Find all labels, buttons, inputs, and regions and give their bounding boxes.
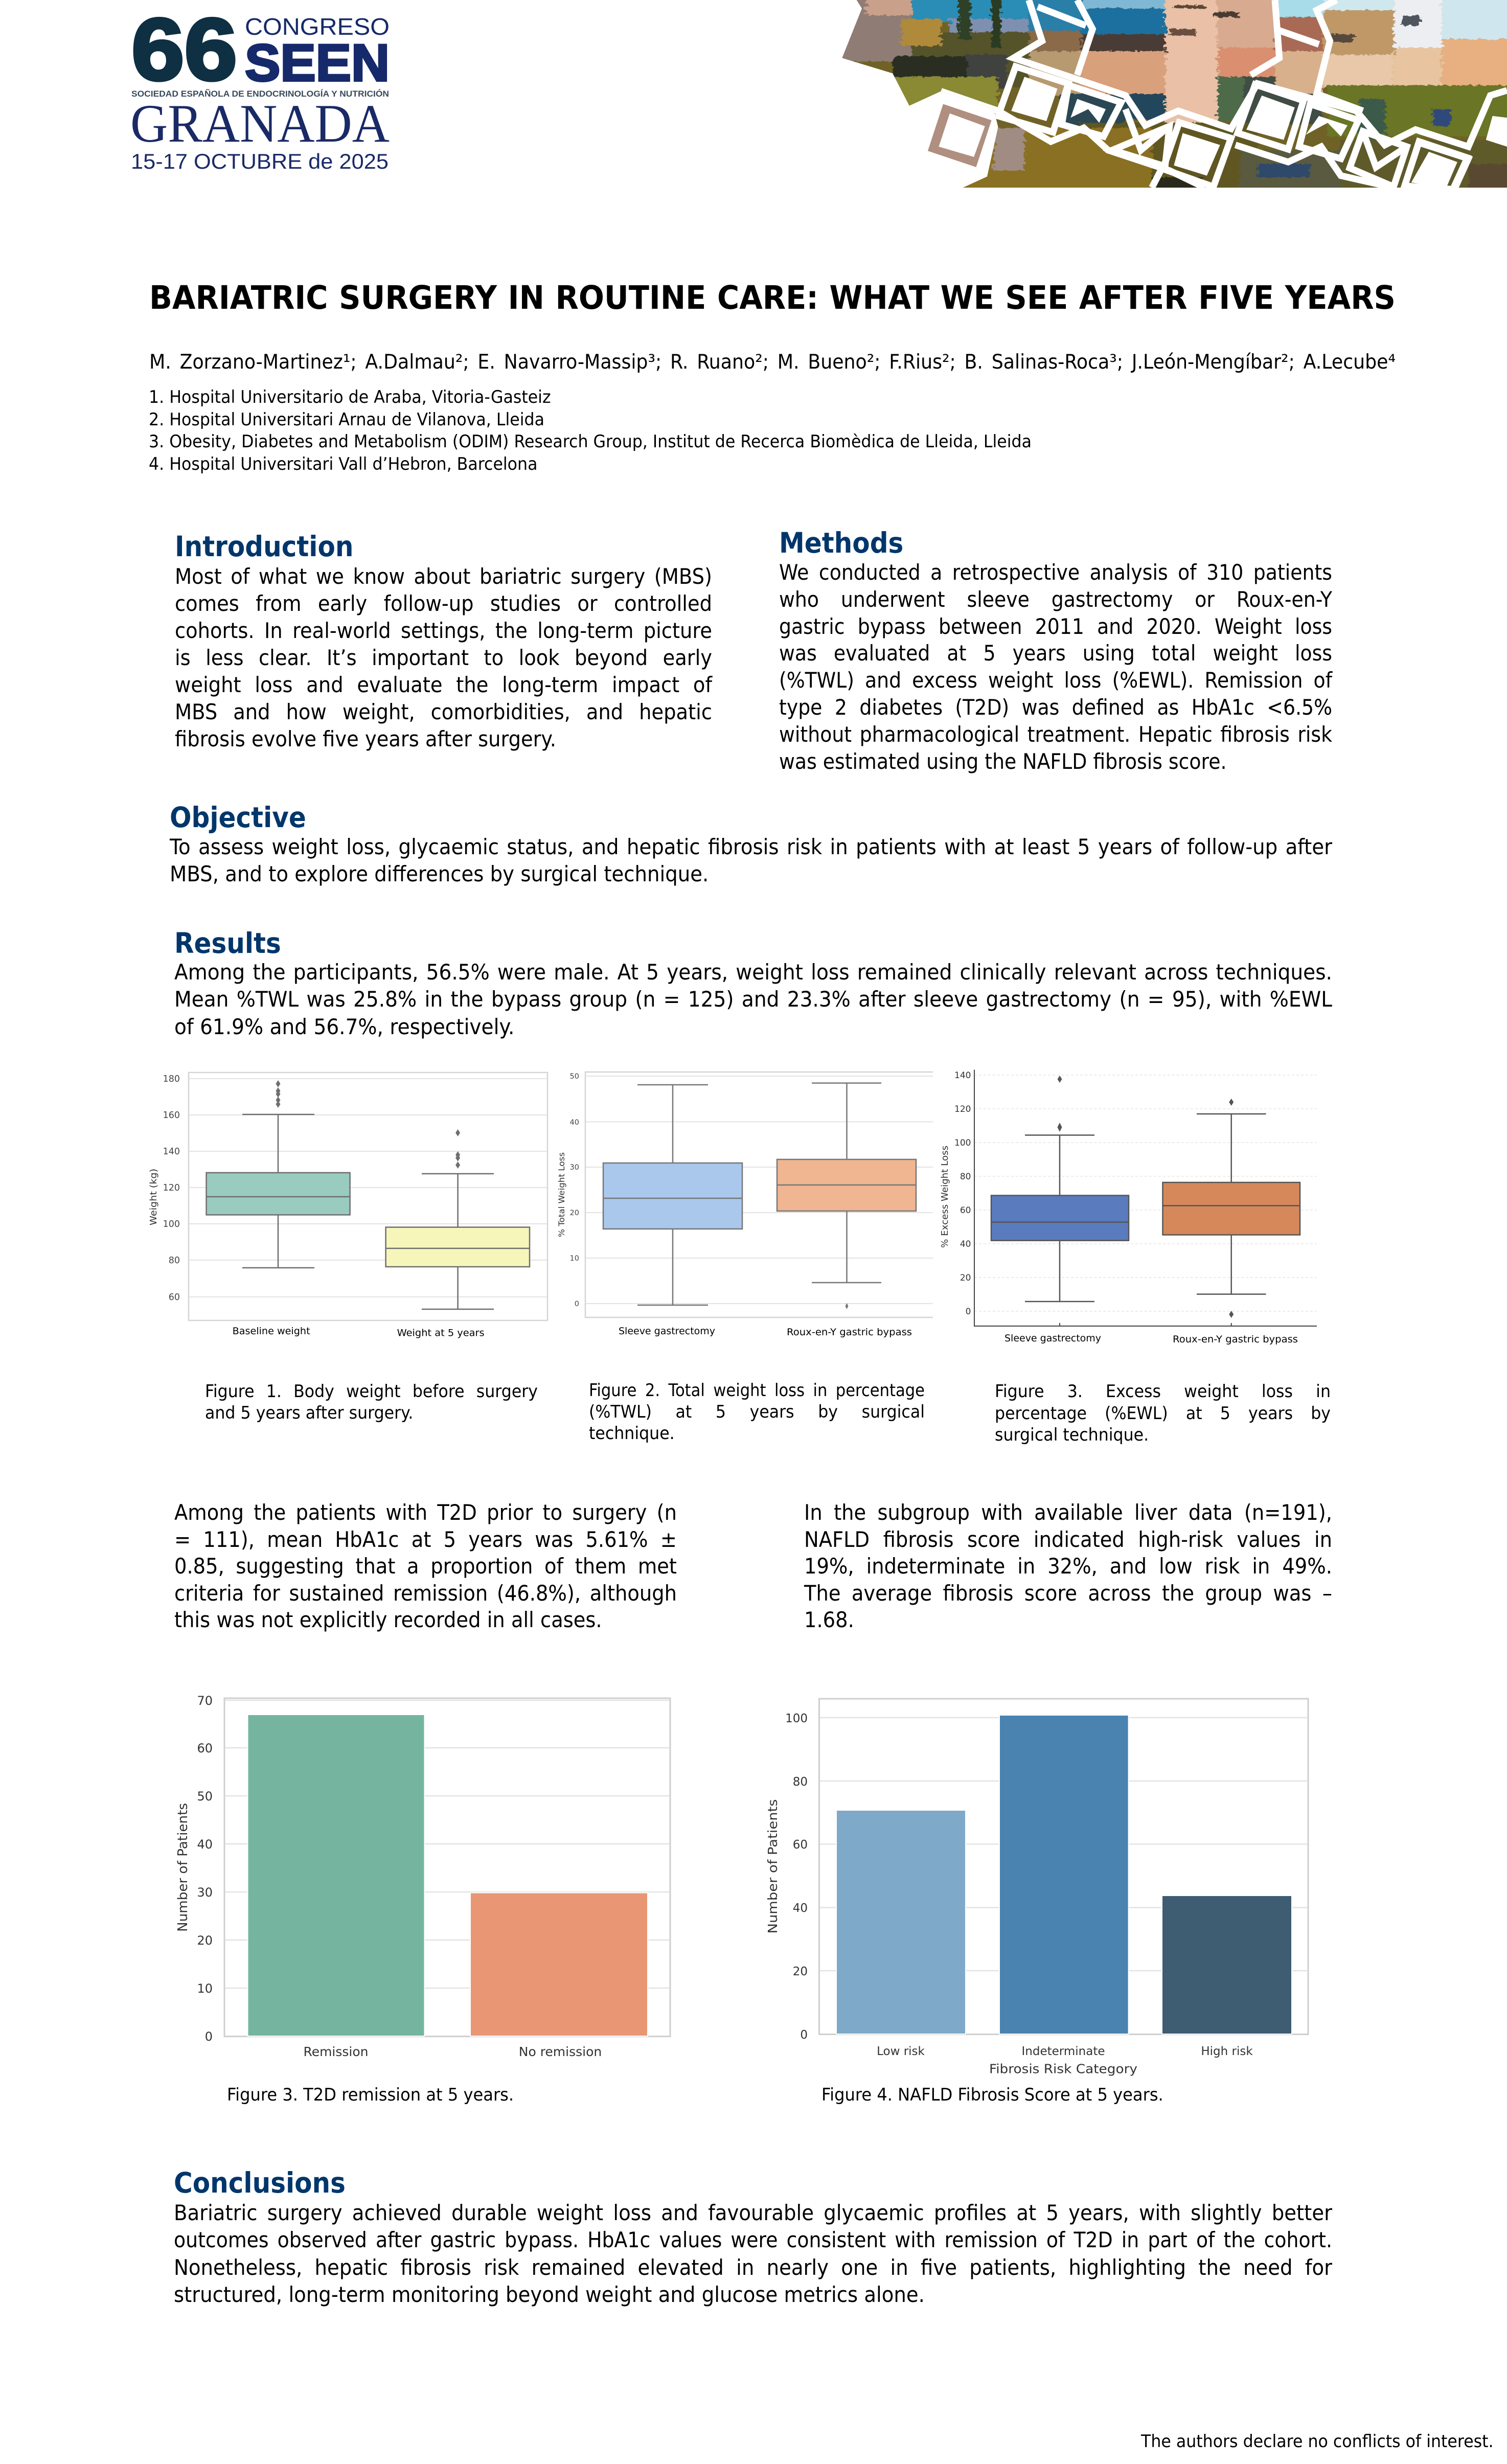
axis tick labels: 100 bbox=[785, 1712, 808, 1725]
text: introduction: comes from early follow-up studies or controlled bbox=[175, 591, 712, 616]
axis tick labels: 30 bbox=[197, 1885, 213, 1900]
axis tick labels: 20 bbox=[793, 1965, 808, 1978]
axis tick labels: 140 bbox=[163, 1147, 180, 1157]
text: methods bbox=[779, 560, 1333, 774]
caption: figure 3 bbox=[995, 1381, 1331, 1445]
text: methods: gastric bypass between 2011 and 2020. Weight loss bbox=[779, 614, 1332, 639]
heading: Objective: Objective bbox=[170, 801, 306, 834]
caption: figure 3: surgical technique. bbox=[995, 1425, 1149, 1445]
axis tick labels: 20 bbox=[570, 1209, 579, 1217]
axis tick labels: 10 bbox=[197, 1981, 213, 1996]
axis tick labels: 100 bbox=[163, 1219, 180, 1229]
text: methods: without pharmacological treatment. Hepatic fibrosis risk bbox=[779, 722, 1332, 747]
chart: T2D remission bars bbox=[171, 1695, 675, 2063]
logo society name: SOCIEDAD ESPAÑOLA DE ENDOCRINOLOGÍA Y NUTRICIÓN bbox=[131, 88, 389, 99]
text: results bbox=[174, 960, 1332, 1039]
x axis labels bbox=[877, 2045, 1253, 2058]
axis tick labels: 30 bbox=[570, 1163, 579, 1172]
x axis labels: Remission bbox=[303, 2044, 369, 2059]
x axis labels: No remission bbox=[519, 2044, 602, 2059]
text: methods: was evaluated at 5 years using total weight loss bbox=[779, 641, 1332, 666]
caption: figure 1: Figure 1. Body weight before surgery bbox=[205, 1381, 538, 1402]
text: conclusions: structured, long-term monitoring beyond weight and glucose metrics alone. bbox=[174, 2282, 925, 2307]
bar: indeterminate bbox=[999, 1715, 1129, 2034]
text: liver fibrosis results: 19%, indeterminate in 32%, and low risk in 49%. bbox=[804, 1554, 1332, 1579]
axis tick labels: 40 bbox=[793, 1902, 808, 1915]
axis tick labels: 120 bbox=[163, 1183, 180, 1193]
text: methods: (%TWL) and excess weight loss (%EWL). Remission of bbox=[779, 668, 1332, 693]
axis tick labels bbox=[785, 1712, 808, 2042]
axis tick labels: 40 bbox=[197, 1837, 213, 1852]
text: objective: MBS, and to explore differences by surgical technique. bbox=[170, 861, 709, 886]
text: liver fibrosis results: NAFLD fibrosis score indicated high-risk values in bbox=[804, 1527, 1332, 1552]
text: T2D remission results: = 111), mean HbA1c at 5 years was 5.61% ± bbox=[174, 1527, 677, 1552]
text: introduction: fibrosis evolve five years after surgery. bbox=[175, 726, 556, 751]
title: BARIATRIC SURGERY IN ROUTINE CARE: WHAT WE SEE AFTER FIVE YEARS bbox=[149, 279, 1396, 316]
logo city GRANADA: GRANADA bbox=[130, 94, 390, 153]
logo word CONGRESO: CONGRESO bbox=[245, 13, 390, 40]
box: Roux-en-Y gastric bypass bbox=[1162, 1099, 1300, 1318]
text: liver fibrosis results bbox=[804, 1500, 1332, 1632]
text: methods: type 2 diabetes (T2D) was defined as HbA1c <6.5% bbox=[779, 695, 1332, 720]
chart: figure 2 total weight loss boxplot bbox=[557, 1071, 933, 1338]
banner detached diamond frame bbox=[928, 104, 992, 167]
caption: figure 1 bbox=[205, 1381, 538, 1423]
caption: figure 3: Figure 3. Excess weight loss in bbox=[995, 1381, 1331, 1402]
caption: figure 2: technique. bbox=[589, 1423, 675, 1444]
box: weight at 5 years bbox=[386, 1129, 530, 1309]
x axis labels: Baseline weight bbox=[233, 1326, 310, 1337]
text: conclusions bbox=[174, 2199, 1332, 2309]
heading: Methods: Methods bbox=[779, 527, 903, 559]
text: T2D remission results: this was not explicitly recorded in all cases. bbox=[174, 1607, 602, 1632]
authors: M. Zorzano-Martinez¹; A.Dalmau²; E. Navarro-Massip³; R. Ruano²; M. Bueno²; F.Rius²; B. Salinas-Roca³; J.León-Mengíbar²; A.Lecube⁴ bbox=[149, 351, 1396, 374]
affiliations: 4. Hospital Universitari Vall d’Hebron, Barcelona bbox=[149, 454, 537, 474]
text: results: of 61.9% and 56.7%, respectively. bbox=[174, 1014, 514, 1039]
logo dates: 15-17 OCTUBRE de 2025 bbox=[131, 149, 389, 173]
text: objective: To assess weight loss, glycaemic status, and hepatic fibrosis risk in patients with at least 5 years of follow-up after bbox=[170, 834, 1332, 859]
caption: T2D remission figure: Figure 3. T2D remission at 5 years. bbox=[227, 2085, 514, 2105]
chart: figure 3 excess weight loss boxplot bbox=[940, 1069, 1317, 1345]
axis tick labels bbox=[197, 1694, 213, 2044]
box: sleeve gastrectomy bbox=[603, 1085, 742, 1305]
x axis labels bbox=[619, 1326, 912, 1338]
box: baseline weight bbox=[207, 1080, 350, 1268]
affiliations: 3. Obesity, Diabetes and Metabolism (ODIM) Research Group, Institut de Recerca Biomèdica de Lleida, Lleida bbox=[149, 431, 1032, 452]
text: T2D remission results: Among the patients with T2D prior to surgery (n bbox=[174, 1500, 677, 1525]
y axis label: Number of Patients bbox=[765, 1799, 780, 1933]
axis tick labels: 20 bbox=[197, 1933, 213, 1948]
axis tick labels: 80 bbox=[169, 1256, 180, 1266]
axis tick labels: 160 bbox=[163, 1110, 180, 1121]
caption: figure 2: Figure 2. Total weight loss in percentage bbox=[589, 1380, 925, 1401]
x axis labels bbox=[233, 1326, 485, 1338]
axis tick labels: 0 bbox=[205, 2029, 213, 2044]
text: T2D remission results: criteria for sustained remission (46.8%), although bbox=[174, 1581, 677, 1606]
caption: figure 3: percentage (%EWL) at 5 years by bbox=[995, 1403, 1331, 1423]
axis tick labels: 40 bbox=[960, 1239, 971, 1249]
x axis labels: High risk bbox=[1201, 2045, 1253, 2058]
text: introduction: is less clear. It’s important to look beyond early bbox=[175, 645, 712, 670]
text: methods: who underwent sleeve gastrectomy or Roux-en-Y bbox=[779, 587, 1332, 612]
x axis labels: Roux-en-Y gastric bypass bbox=[1173, 1334, 1298, 1345]
axis tick labels: 0 bbox=[966, 1307, 971, 1317]
axis tick labels bbox=[570, 1073, 579, 1308]
x axis labels: Low risk bbox=[877, 2045, 925, 2058]
text: results: Mean %TWL was 25.8% in the bypass group (n = 125) and 23.3% after sleeve gastrectomy (n = 95), with %EWL bbox=[174, 987, 1332, 1012]
x axis labels: Roux-en-Y gastric bypass bbox=[787, 1327, 912, 1338]
x axis labels: Sleeve gastrectomy bbox=[1004, 1333, 1101, 1344]
affiliations: 1. Hospital Universitario de Araba, Vitoria-Gasteiz bbox=[149, 387, 551, 407]
bar: high risk bbox=[1162, 1896, 1292, 2034]
text: introduction: weight loss and evaluate the long-term impact of bbox=[175, 672, 712, 697]
axis tick labels: 180 bbox=[163, 1074, 180, 1084]
caption: figure 2 bbox=[589, 1380, 925, 1444]
text: T2D remission results: 0.85, suggesting that a proportion of them met bbox=[174, 1554, 677, 1579]
text: results: Among the participants, 56.5% were male. At 5 years, weight loss remained clinically relevant across techniques. bbox=[174, 960, 1332, 985]
text: introduction: cohorts. In real-world settings, the long-term picture bbox=[175, 618, 712, 643]
axis tick labels: 60 bbox=[960, 1205, 971, 1216]
text: T2D remission results bbox=[174, 1500, 677, 1632]
y axis label: % Excess Weight Loss bbox=[940, 1146, 950, 1248]
bar: no remission bbox=[470, 1892, 648, 2036]
caption: figure 2: (%TWL) at 5 years by surgical bbox=[589, 1402, 925, 1422]
x axis labels bbox=[1004, 1333, 1298, 1345]
axis tick labels bbox=[954, 1070, 971, 1317]
axis tick labels: 40 bbox=[570, 1119, 579, 1127]
logo: 66 Congreso SEEN Granada bbox=[130, 13, 390, 173]
caption: NAFLD figure: Figure 4. NAFLD Fibrosis Score at 5 years. bbox=[821, 2085, 1163, 2105]
heading: Results: Results bbox=[174, 927, 281, 960]
axis tick labels: 10 bbox=[570, 1254, 579, 1263]
text: conclusions: Bariatric surgery achieved durable weight loss and favourable glycaemic profiles at 5 years, with slightly better bbox=[174, 2200, 1332, 2225]
axis tick labels: 140 bbox=[954, 1070, 971, 1081]
caption: figure 1: and 5 years after surgery. bbox=[205, 1403, 413, 1423]
x axis labels: Indeterminate bbox=[1022, 2045, 1105, 2058]
axis tick labels: 50 bbox=[570, 1073, 579, 1081]
axis tick labels: 20 bbox=[960, 1273, 971, 1283]
y axis label: Weight (kg) bbox=[148, 1169, 159, 1225]
chart: figure 1 body weight boxplot bbox=[148, 1071, 548, 1338]
axis tick labels: 80 bbox=[793, 1775, 808, 1789]
axis tick labels: 100 bbox=[954, 1138, 971, 1148]
x axis labels: Weight at 5 years bbox=[397, 1327, 485, 1338]
banner white diamonds bbox=[1011, 77, 1507, 188]
banner: painted Alhambra view with geometric pattern bbox=[842, 0, 1507, 188]
x axis labels bbox=[303, 2044, 602, 2059]
banner white zigzag lattice bbox=[941, 0, 1507, 189]
axis tick labels: 0 bbox=[575, 1300, 579, 1308]
axis tick labels: 0 bbox=[800, 2028, 808, 2042]
y axis label: Number of Patients bbox=[175, 1803, 191, 1932]
text: liver fibrosis results: In the subgroup with available liver data (n=191), bbox=[804, 1500, 1332, 1525]
text: liver fibrosis results: The average fibrosis score across the group was – bbox=[804, 1581, 1332, 1606]
chart: NAFLD fibrosis bars bbox=[759, 1695, 1314, 2078]
affiliations: 2. Hospital Universitari Arnau de Vilanova, Lleida bbox=[149, 409, 544, 429]
box: Roux-en-Y gastric bypass bbox=[777, 1083, 916, 1309]
box: sleeve gastrectomy bbox=[991, 1076, 1129, 1302]
axis tick labels: 60 bbox=[169, 1292, 180, 1303]
x axis title: Fibrosis Risk Category bbox=[989, 2061, 1137, 2077]
axis tick labels: 80 bbox=[960, 1172, 971, 1182]
axis tick labels: 120 bbox=[954, 1104, 971, 1114]
text: introduction: Most of what we know about bariatric surgery (MBS) bbox=[175, 564, 712, 589]
bar: remission bbox=[247, 1715, 424, 2036]
axis tick labels bbox=[163, 1074, 180, 1303]
bar: low risk bbox=[836, 1810, 966, 2034]
footer: conflict of interest statement: The authors declare no conflicts of interest. bbox=[1141, 2431, 1494, 2452]
axis tick labels: 50 bbox=[197, 1789, 213, 1804]
text: methods: was estimated using the NAFLD fibrosis score. bbox=[779, 749, 1227, 774]
affiliations bbox=[149, 387, 1032, 474]
heading: Introduction: Introduction bbox=[175, 530, 353, 563]
x axis labels: Sleeve gastrectomy bbox=[619, 1326, 715, 1337]
text: objective bbox=[170, 834, 1332, 886]
text: methods: We conducted a retrospective analysis of 310 patients bbox=[779, 560, 1332, 585]
y axis label: % Total Weight Loss bbox=[557, 1152, 566, 1237]
text: conclusions: outcomes observed after gastric bypass. HbA1c values were consistent with remission of T2D in part of the cohort. bbox=[174, 2227, 1332, 2252]
logo word SEEN: SEEN bbox=[245, 34, 390, 92]
text: conclusions: Nonetheless, hepatic fibrosis risk remained elevated in nearly one in five patients, highlighting the need for bbox=[174, 2255, 1332, 2280]
text: liver fibrosis results: 1.68. bbox=[804, 1607, 854, 1632]
text: introduction bbox=[175, 564, 713, 751]
heading: Conclusions: Conclusions bbox=[174, 2166, 346, 2199]
axis tick labels: 60 bbox=[793, 1838, 808, 1852]
text: introduction: MBS and how weight, comorbidities, and hepatic bbox=[175, 699, 712, 724]
axis tick labels: 60 bbox=[197, 1741, 213, 1755]
